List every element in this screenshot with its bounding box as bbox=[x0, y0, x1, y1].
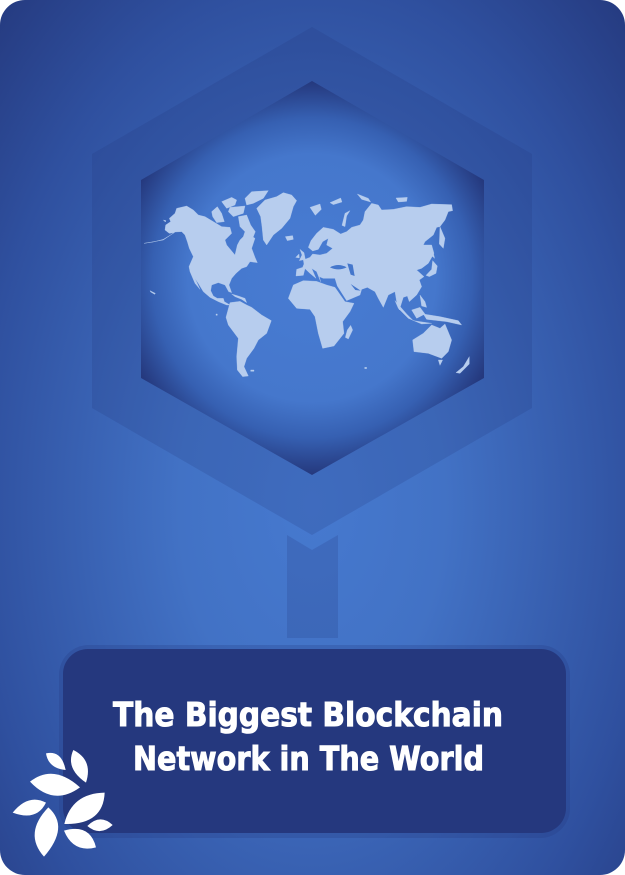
Southeast Asia islands bbox=[395, 295, 462, 325]
Iceland and small islands bbox=[216, 197, 407, 371]
Caribbean and Pacific islands bbox=[150, 220, 247, 303]
Africa bbox=[288, 281, 354, 348]
panel outline bbox=[59, 645, 570, 838]
title text: The Biggest Blockchain bbox=[113, 695, 503, 734]
Madagascar bbox=[345, 325, 353, 339]
New Zealand bbox=[456, 357, 469, 373]
United Kingdom and Ireland bbox=[296, 249, 305, 261]
Caspian Sea bbox=[347, 263, 355, 276]
North America bbox=[144, 206, 257, 305]
Novaya Zemlya and Arctic Russia bbox=[342, 194, 371, 227]
Black Sea bbox=[330, 265, 347, 269]
panel fill bbox=[63, 649, 566, 833]
outer hexagon bbox=[92, 27, 532, 535]
Eurasia bbox=[296, 203, 453, 310]
world map bbox=[144, 191, 469, 377]
Canadian Arctic islands bbox=[212, 191, 268, 238]
title text: Network in The World bbox=[133, 739, 484, 778]
Kamchatka, Sakhalin and Japan bbox=[426, 227, 445, 277]
title panel bbox=[59, 645, 570, 838]
icon: white leaves logo bbox=[13, 750, 113, 857]
Australia bbox=[413, 324, 452, 365]
South America bbox=[226, 301, 271, 377]
inner hexagon bbox=[141, 81, 484, 475]
stem connector bbox=[287, 535, 338, 638]
Persian Gulf bbox=[351, 284, 361, 291]
Greenland bbox=[257, 193, 297, 245]
